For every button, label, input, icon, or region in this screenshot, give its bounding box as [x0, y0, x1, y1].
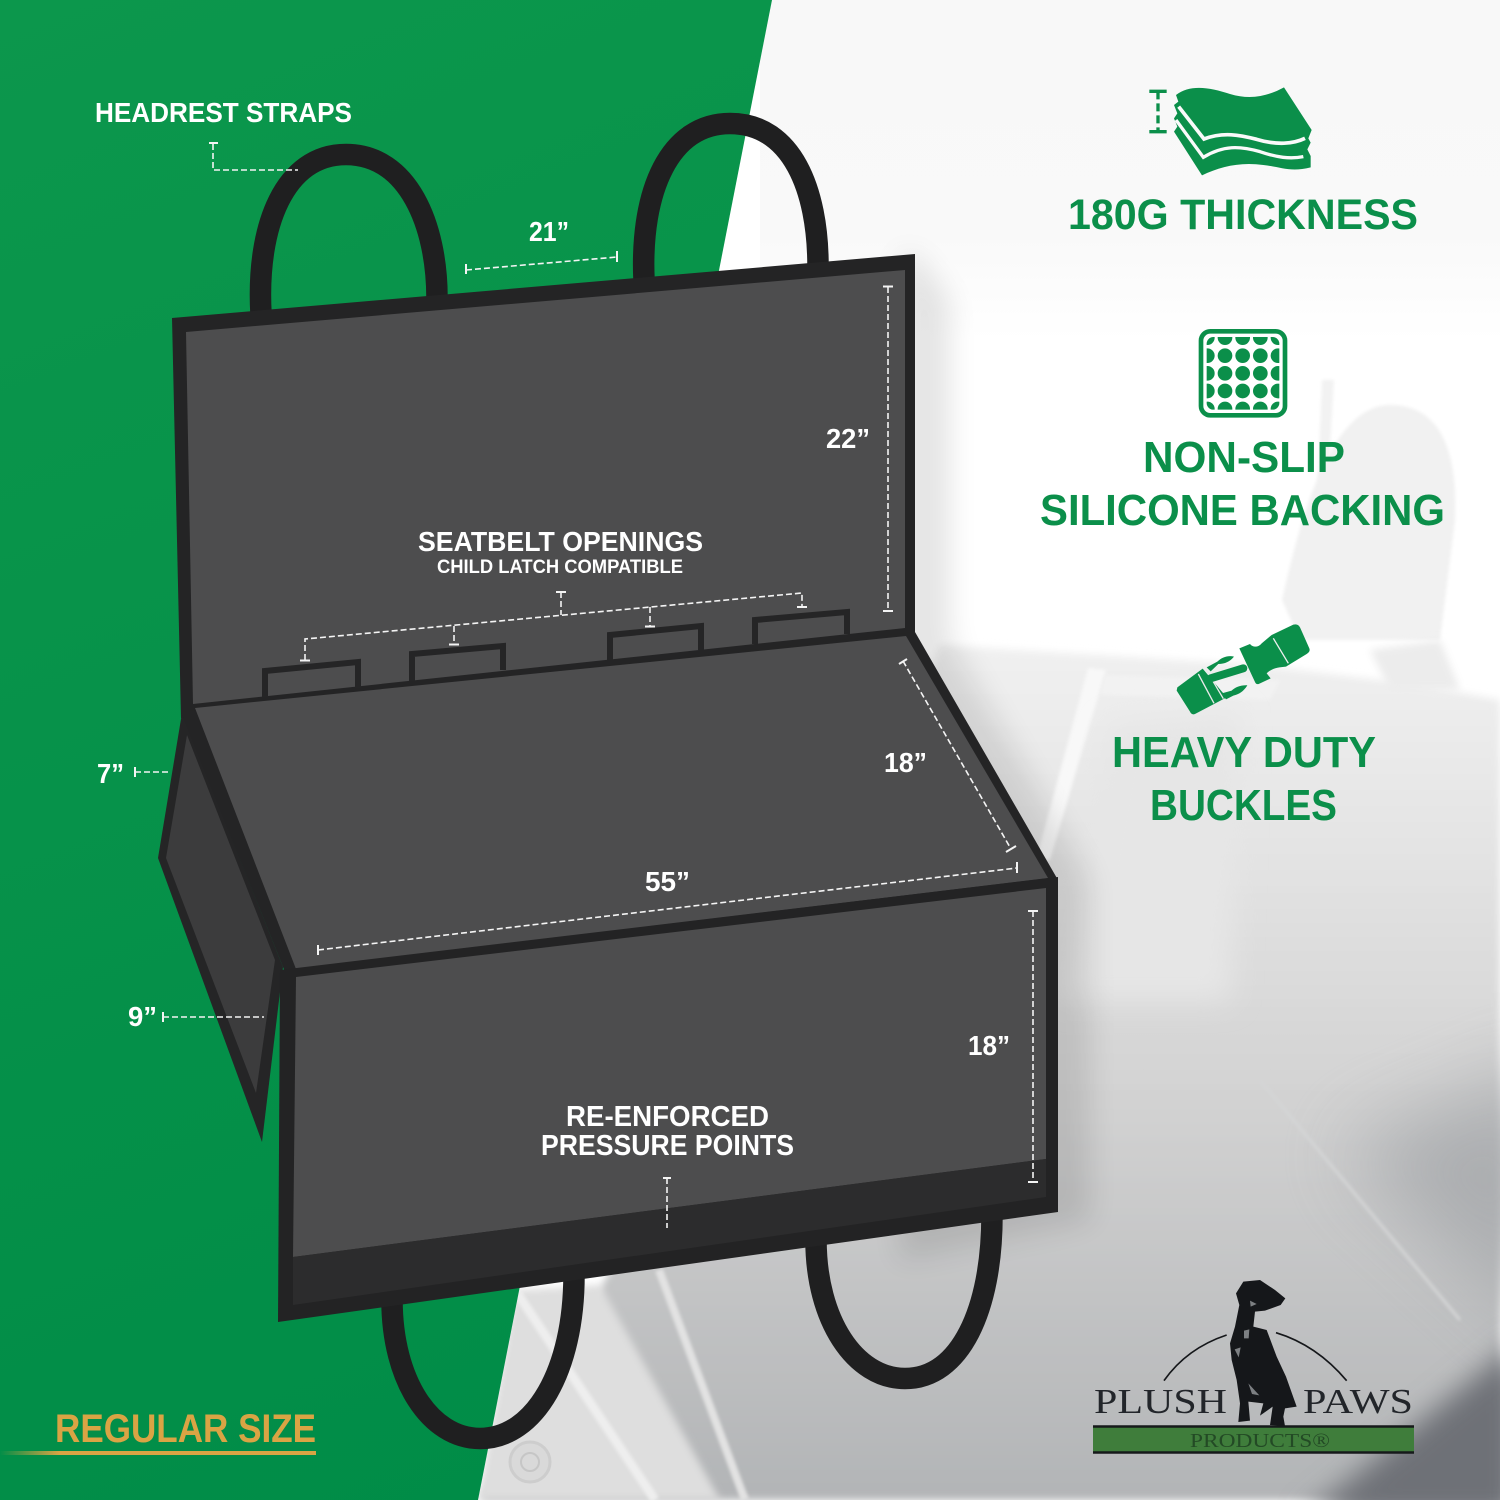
icon: silicone dot grid	[1200, 330, 1285, 416]
soft shadow behind seat cover	[900, 254, 1090, 1260]
logo: plush paws products	[1093, 1280, 1414, 1453]
logo green bar	[1093, 1426, 1414, 1453]
pressure point leader	[663, 1178, 671, 1228]
logo wordmark: PLUSH	[1094, 1382, 1227, 1421]
front drop panel	[278, 877, 1058, 1322]
logo arcs	[1164, 1333, 1347, 1381]
dimension: 18 inch drop	[968, 911, 1038, 1182]
icon: heavy duty buckle	[1177, 624, 1310, 714]
dimension: 22 inch	[826, 286, 893, 611]
bottom anchor straps	[392, 1215, 992, 1438]
dimension: seat depth 18 inch	[884, 659, 1016, 852]
seatbelt openings bracket	[300, 592, 807, 660]
label: seatbelt openings	[418, 526, 703, 578]
label: heavy duty buckles: HEAVY DUTY	[1112, 728, 1376, 777]
label: heavy duty buckles	[1112, 728, 1376, 830]
label: re-enforced pressure points	[541, 1101, 794, 1162]
logo wordmark: PAWS	[1303, 1382, 1413, 1421]
label: headrest straps: HEADREST STRAPS	[95, 97, 352, 128]
logo products text: PRODUCTS®	[1190, 1430, 1330, 1452]
label: non-slip silicone backing: SILICONE BACKING	[1040, 486, 1445, 535]
seat panel	[181, 632, 1058, 972]
label: seatbelt openings: SEATBELT OPENINGS	[418, 526, 703, 557]
label: regular size	[0, 1407, 316, 1455]
logo dog silhouette	[1230, 1280, 1297, 1426]
dimension: 9 inch	[128, 1001, 264, 1032]
dimension: 7 inch: 7”	[97, 758, 124, 789]
dimension: 21 inch	[466, 216, 617, 274]
dimension: 9 inch: 9”	[128, 1001, 157, 1032]
dimension: 21 inch: 21”	[529, 216, 569, 247]
label: re-enforced pressure points: RE-ENFORCED	[566, 1101, 769, 1133]
label: re-enforced pressure points: PRESSURE POINTS	[541, 1130, 794, 1162]
dimension: 18 inch drop: 18”	[968, 1030, 1010, 1061]
dimension: headrest straps leader	[209, 143, 298, 170]
side flap	[158, 713, 283, 1142]
logo wordmark	[1094, 1382, 1413, 1421]
back rest panel	[172, 254, 915, 718]
label: heavy duty buckles: BUCKLES	[1150, 781, 1337, 830]
icon: fabric layers thickness	[1149, 87, 1312, 175]
label: regular size: REGULAR SIZE	[55, 1407, 316, 1451]
dimension: seat depth 18 inch: 18”	[884, 747, 927, 778]
label: 180g thickness: 180G THICKNESS	[1068, 191, 1418, 239]
label: seatbelt openings: CHILD LATCH COMPATIBLE	[437, 556, 683, 578]
dimension: 22 inch: 22”	[826, 423, 870, 454]
label: non-slip silicone backing	[1040, 433, 1445, 535]
dimension: 55 inch width: 55”	[645, 866, 690, 897]
dimension: 55 inch width	[318, 862, 1017, 955]
headrest straps	[260, 124, 818, 314]
seatbelt openings	[265, 612, 847, 697]
green diagonal background panel	[0, 0, 772, 1500]
label: non-slip silicone backing: NON-SLIP	[1143, 433, 1345, 482]
dimension: 7 inch	[97, 758, 170, 789]
